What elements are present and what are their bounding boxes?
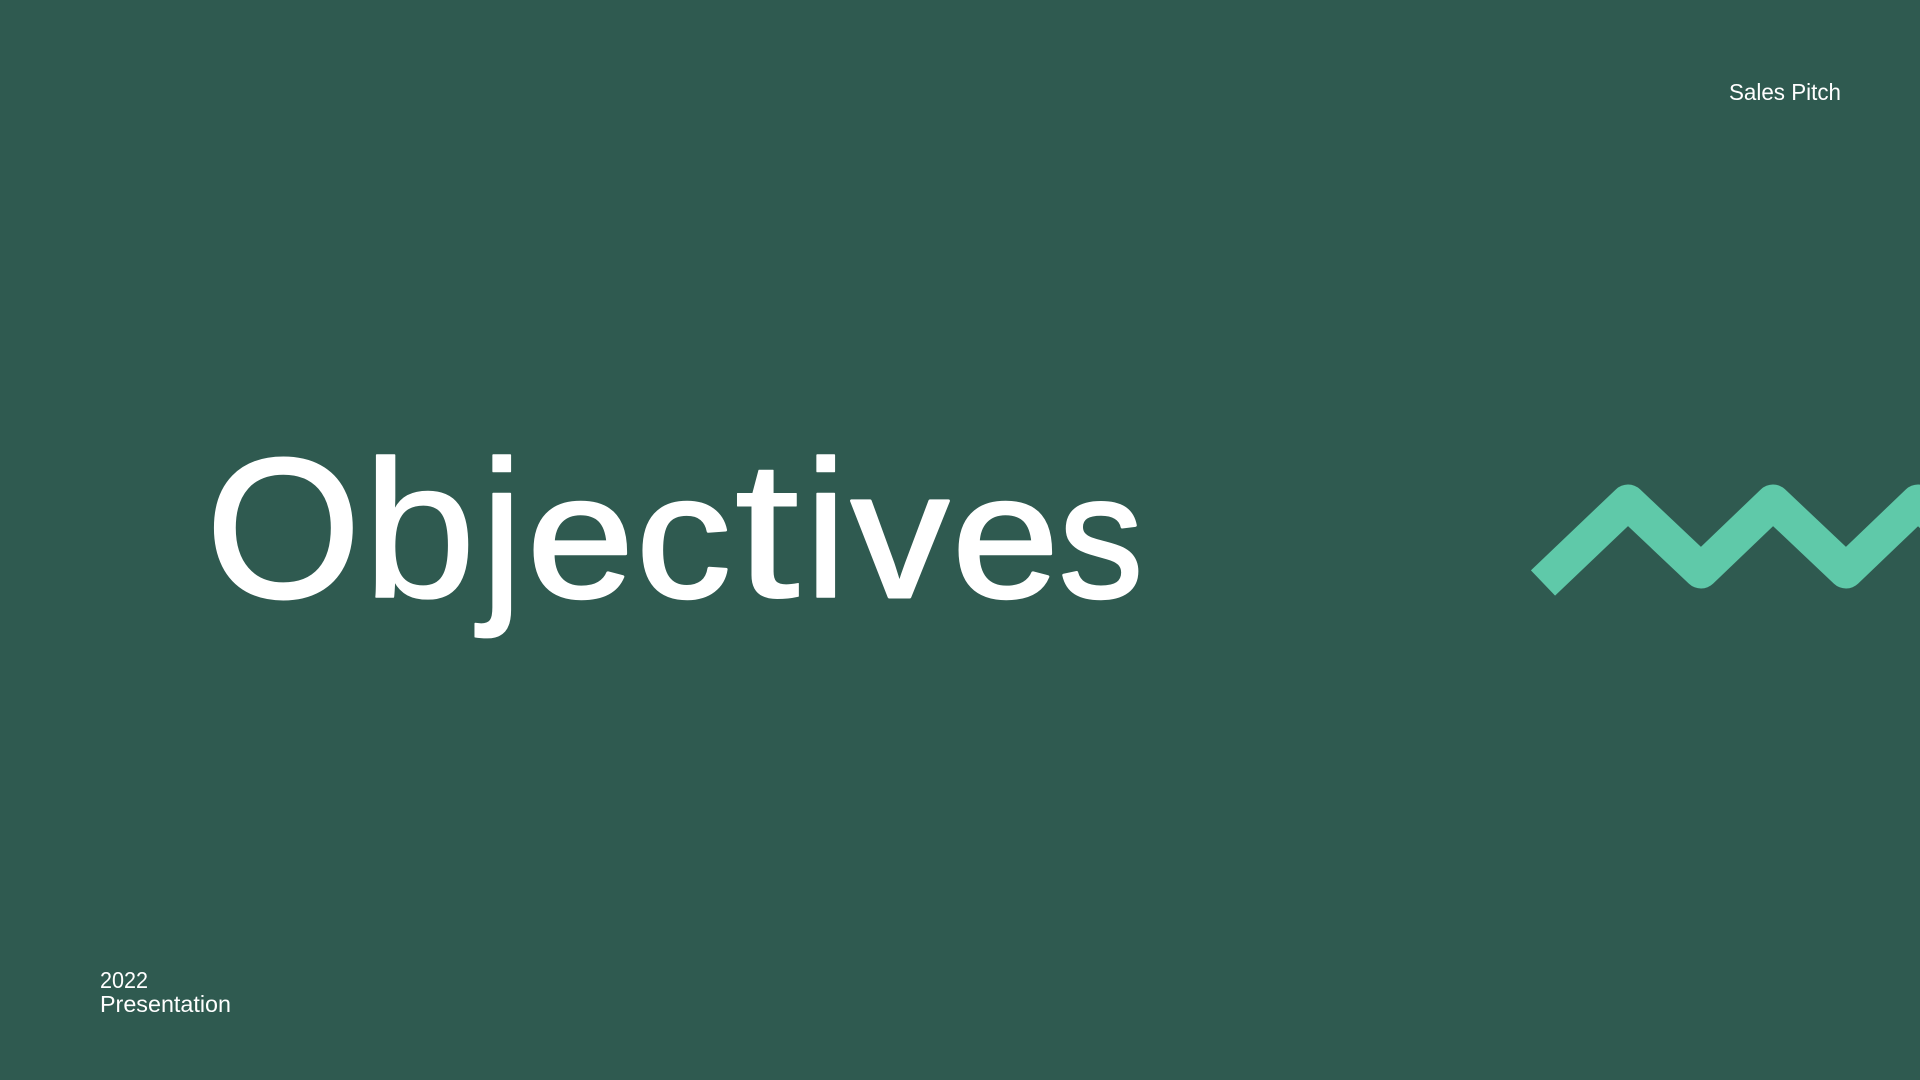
title: Objectives: i — [804, 420, 848, 639]
header label: Sales Pitch: Sales Pitch — [1729, 79, 1841, 105]
title: Objectives: O — [206, 418, 361, 640]
footer text: 2022 Presentation — [100, 967, 231, 1017]
title: Objectives: e — [952, 439, 1059, 635]
title: Objectives: t — [734, 420, 800, 639]
title: Objectives: b — [363, 420, 476, 639]
title: Objectives: e — [527, 439, 634, 635]
title: Objectives: s — [1059, 439, 1143, 635]
footer text: 2022 Presentation: 2022 — [100, 967, 148, 993]
footer text: 2022 Presentation: Presentation — [100, 991, 231, 1017]
title: Objectives: c — [636, 439, 731, 635]
title: Objectives: j — [475, 420, 524, 639]
icon: green zigzag line — [1543, 502, 1920, 583]
title: Objectives: v — [851, 432, 949, 636]
